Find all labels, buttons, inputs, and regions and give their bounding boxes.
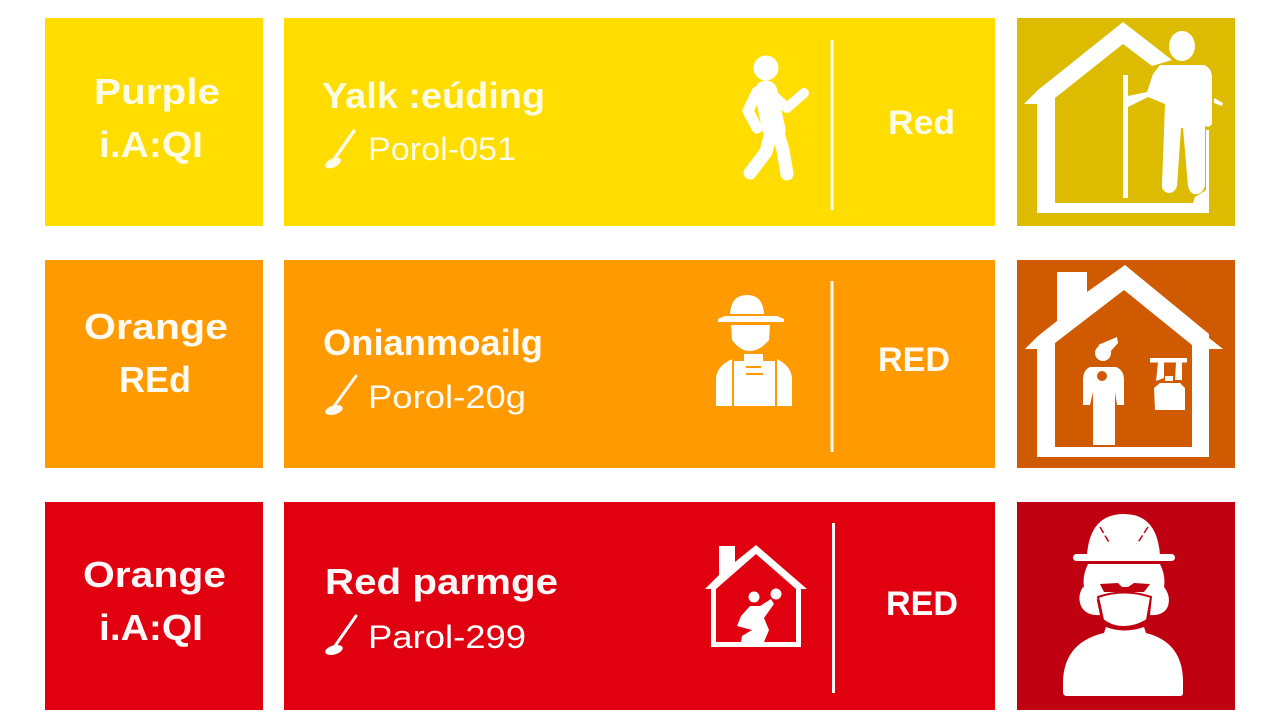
panel: red label: i.A:QI xyxy=(99,607,203,648)
panel: red main: Parol-299 xyxy=(368,619,526,655)
icon: person with hard hat and mask xyxy=(1017,502,1235,710)
panel: orange main: Porol-20g xyxy=(368,379,526,415)
panel: red row xyxy=(45,502,1235,710)
panel: red label: Orange xyxy=(83,554,226,595)
panel: yellow main xyxy=(284,18,995,226)
panel: orange row xyxy=(45,260,1235,468)
panel: red label xyxy=(45,502,263,710)
icon: spoon xyxy=(323,131,354,171)
panel: yellow row xyxy=(45,18,1235,226)
panel: orange main xyxy=(284,260,995,468)
icon: house with person and tools xyxy=(1017,260,1235,468)
panel: red main xyxy=(284,502,995,710)
icon: house with person and cane xyxy=(1017,18,1235,226)
icon: spoon xyxy=(324,616,356,657)
panel: red main: Red parmge xyxy=(325,561,558,602)
icon: small house with person xyxy=(705,545,807,647)
panel: yellow label: i.A:QI xyxy=(99,124,203,165)
panel: orange main: RED xyxy=(878,341,950,379)
panel: yellow label xyxy=(45,18,263,226)
icon: worker with hard hat xyxy=(716,295,792,406)
panel: orange label xyxy=(45,260,263,468)
panel: yellow main: Porol-051 xyxy=(368,131,516,167)
panel: orange label: Orange xyxy=(84,306,228,347)
panel: orange label: REd xyxy=(119,359,191,400)
icon: walking person xyxy=(748,56,804,174)
panel: yellow main: Red xyxy=(888,104,955,142)
panel: red main: RED xyxy=(886,585,958,623)
panel: orange main: Onianmoailg xyxy=(323,322,543,363)
panel: yellow label: Purple xyxy=(94,71,220,112)
panel: yellow main: Yalk :eúding xyxy=(322,75,545,116)
icon: spoon xyxy=(324,376,356,417)
